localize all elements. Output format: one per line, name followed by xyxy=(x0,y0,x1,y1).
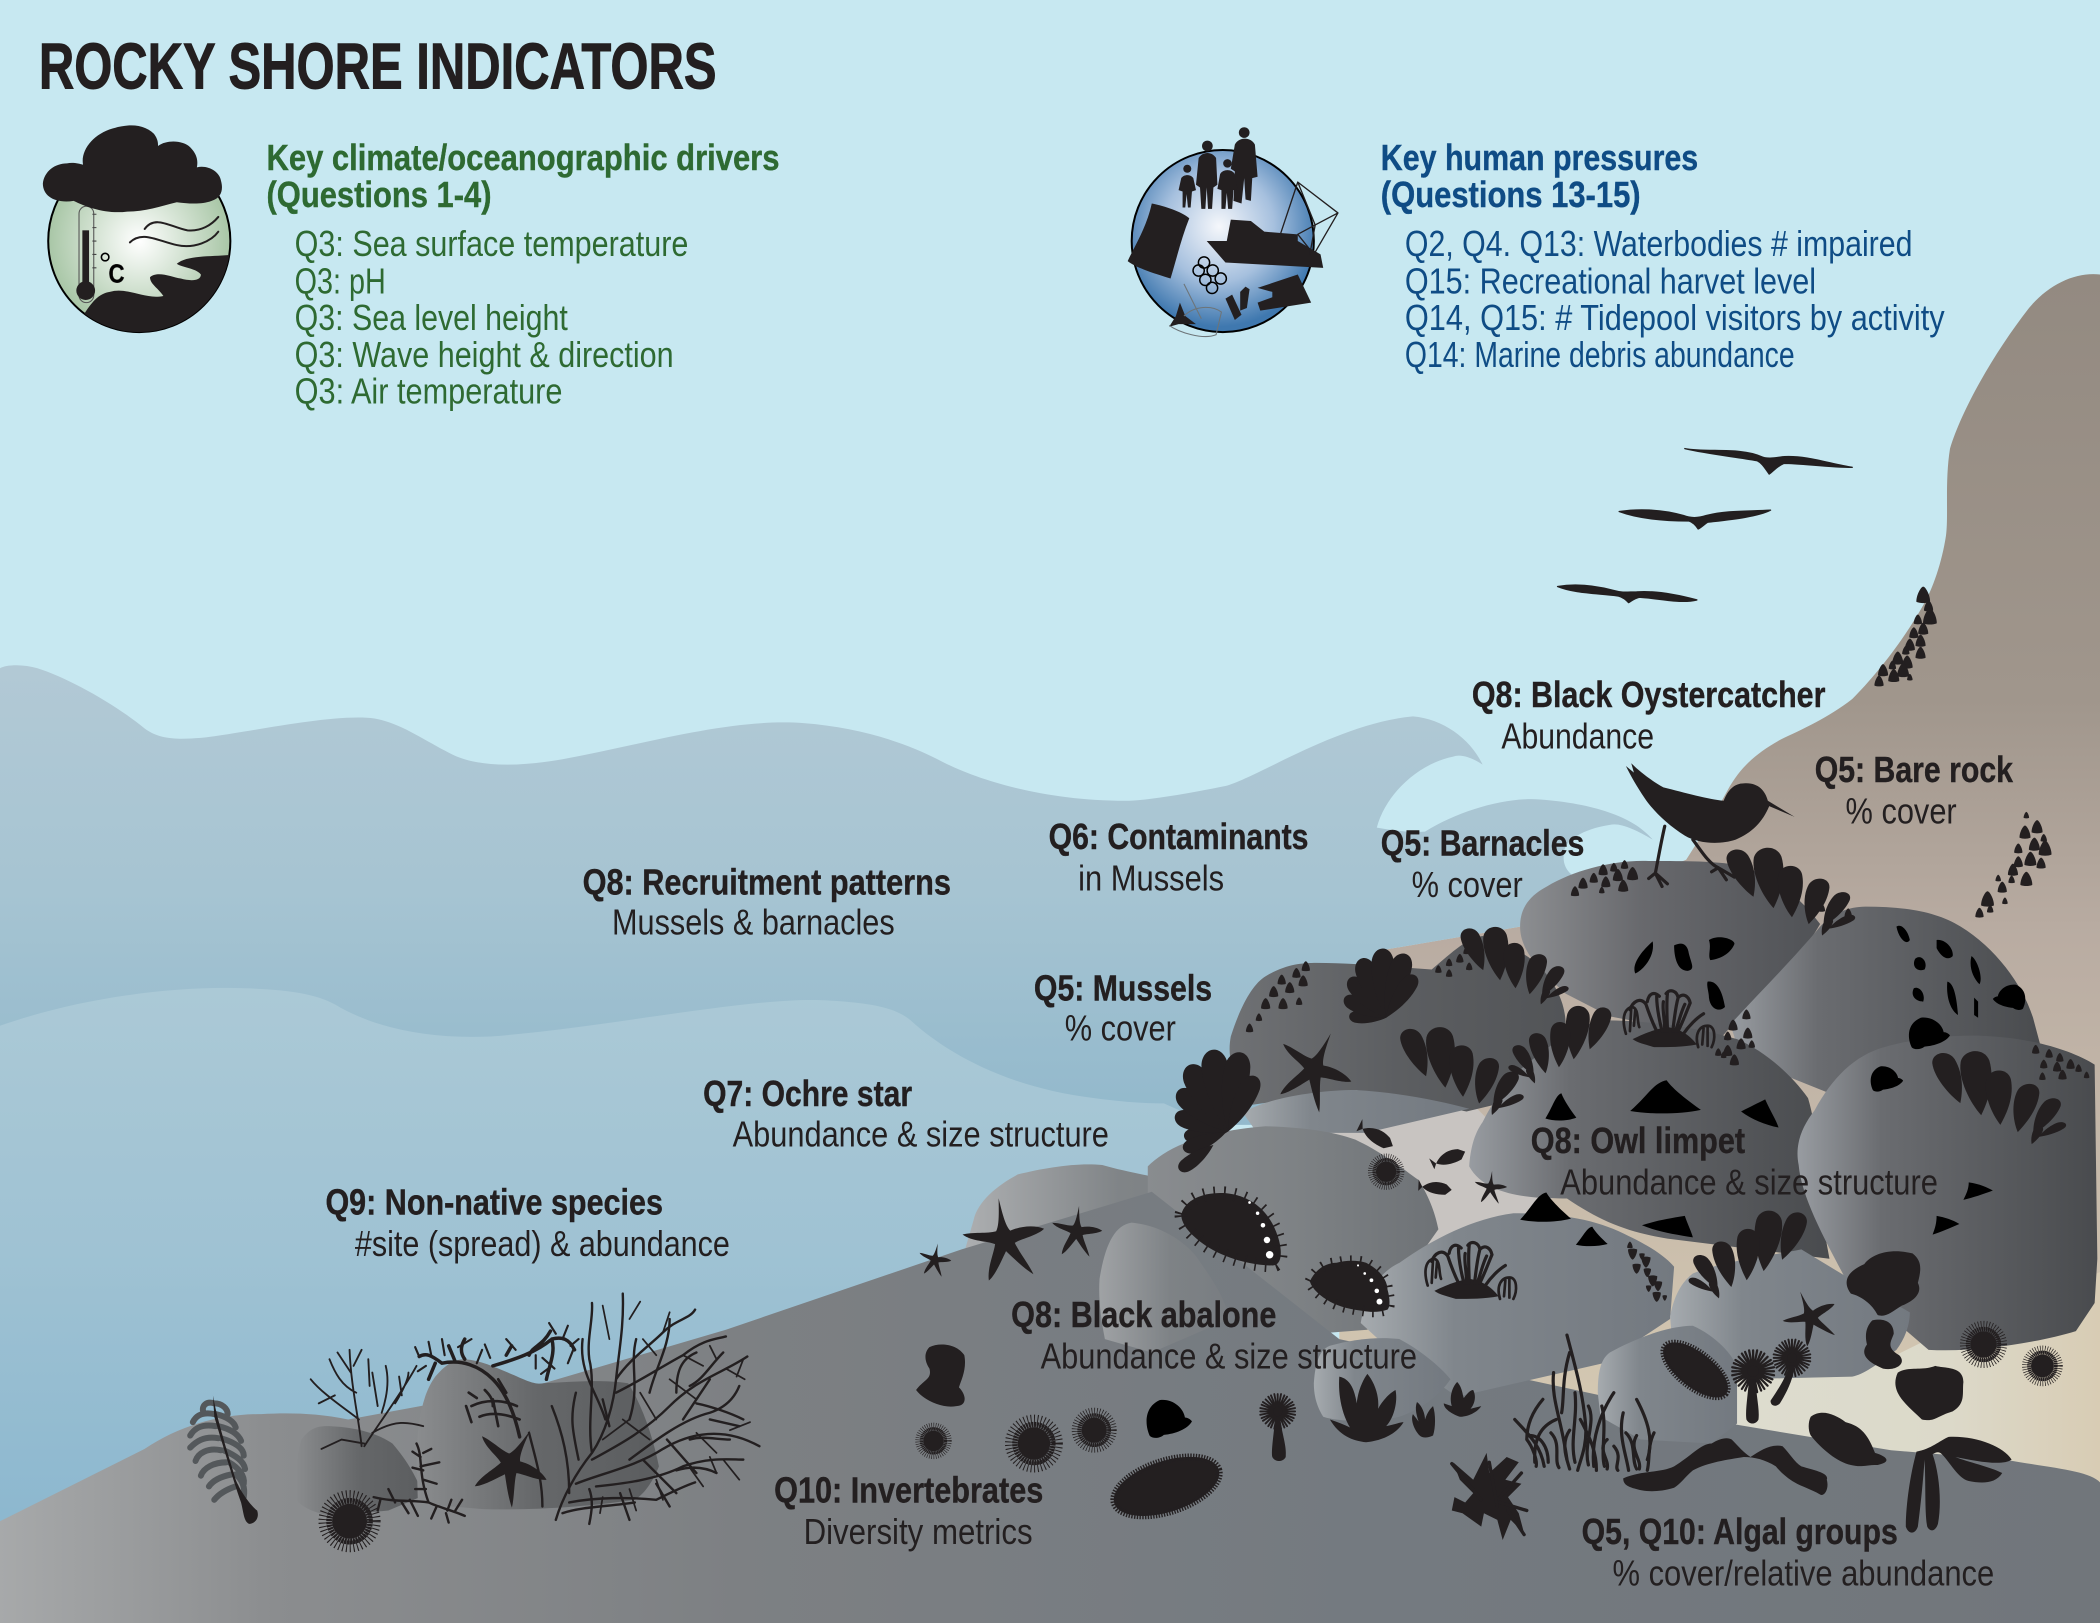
label: owl limpet xyxy=(1531,1120,1938,1202)
heading: climate drivers xyxy=(267,137,779,215)
rock: dark grey stone near fish xyxy=(1148,1126,1438,1339)
rock: lower right xyxy=(1798,1036,2097,1350)
heading: climate drivers: Key climate/oceanographic drivers xyxy=(267,137,779,178)
barnacles on cliff xyxy=(1874,587,1937,686)
label: barnacles: % cover xyxy=(1412,864,1523,905)
rock: right mid xyxy=(1670,1249,1910,1379)
blob algae xyxy=(916,1251,1963,1466)
rock: grey far left xyxy=(964,1164,1246,1319)
barnacles on perch rock xyxy=(1571,860,1852,917)
seagrass xyxy=(1515,1335,1654,1470)
list: human pressures: Q15: Recreational harvet level xyxy=(1405,260,1816,301)
rock: abalone side rock xyxy=(1099,1223,1229,1352)
icon: human pressures xyxy=(1128,127,1338,337)
label: contaminants: in Mussels xyxy=(1078,858,1224,899)
label: non-native species xyxy=(325,1182,730,1264)
label: mussels: % cover xyxy=(1065,1007,1176,1048)
rock: bird perch xyxy=(1520,861,1820,1038)
list: climate drivers: Q3: pH xyxy=(295,260,386,301)
label: black oystercatcher xyxy=(1472,674,1825,757)
hairy chitons xyxy=(1106,1332,1737,1528)
barnacles lower centre xyxy=(1627,1242,1667,1302)
list: climate drivers: Q3: Wave height & direction xyxy=(295,334,674,375)
label: recruitment patterns: Mussels & barnacles xyxy=(612,902,895,943)
label: barnacles: Q5: Barnacles xyxy=(1381,823,1584,864)
label: contaminants xyxy=(1049,816,1308,899)
cliff and sand xyxy=(1339,274,2100,1540)
anemones xyxy=(1260,1340,1810,1461)
label: contaminants: Q6: Contaminants xyxy=(1049,816,1308,857)
list: climate drivers xyxy=(295,223,688,412)
barnacles on bare rock xyxy=(1975,812,2051,918)
band algae xyxy=(1623,1437,2012,1533)
non-native seaweed fan xyxy=(529,1294,759,1524)
label: invertebrates: Q10: Invertebrates xyxy=(774,1469,1043,1510)
heading: human pressures xyxy=(1381,137,1698,215)
label: black oystercatcher: Abundance xyxy=(1501,716,1654,757)
front water xyxy=(0,988,1272,1527)
rock: lower right small xyxy=(1598,1326,1737,1444)
flying birds xyxy=(1558,449,1852,603)
icon: climate drivers xyxy=(40,125,234,341)
label: ochre star: Abundance & size structure xyxy=(733,1113,1109,1154)
list: human pressures: Q14: Marine debris abundance xyxy=(1405,334,1795,375)
mussels spots on perch rocks xyxy=(1147,926,2025,1438)
heading: human pressures: Key human pressures xyxy=(1381,137,1698,178)
label: non-native species: Q9: Non-native species xyxy=(325,1182,663,1223)
heading: human pressures: (Questions 13-15) xyxy=(1381,174,1641,215)
label: bare rock: % cover xyxy=(1846,791,1957,832)
non-native branching weed xyxy=(311,1350,423,1449)
rock: mid grey behind xyxy=(1243,1090,1469,1145)
label: invertebrates xyxy=(774,1469,1043,1552)
back wave xyxy=(0,665,1653,1125)
foreground ground xyxy=(0,1192,2100,1623)
non-native coral weed xyxy=(374,1323,579,1523)
black abalone xyxy=(1181,1193,1390,1312)
black oystercatcher xyxy=(1626,763,1795,886)
mussel clusters xyxy=(1171,847,2068,1299)
label: ochre star xyxy=(703,1073,1109,1154)
label: black oystercatcher: Q8: Black Oystercatcher xyxy=(1472,674,1825,715)
label: recruitment patterns: Q8: Recruitment patterns xyxy=(583,862,951,903)
label: algal groups xyxy=(1582,1511,1994,1594)
list: climate drivers: Q3: Air temperature xyxy=(295,371,563,412)
label: black abalone: Abundance & size structure xyxy=(1041,1336,1417,1377)
tube anemone clusters xyxy=(1425,991,1714,1299)
rock: central large xyxy=(1361,1213,1674,1397)
pale sand foreground xyxy=(1728,1272,2100,1489)
owl limpets xyxy=(1520,1080,1993,1246)
barnacles centre xyxy=(1715,1010,1755,1065)
heading: climate drivers: (Questions 1-4) xyxy=(267,174,492,215)
list: human pressures xyxy=(1405,223,1945,375)
title: ROCKY SHORE INDICATORS xyxy=(39,29,717,102)
label: black abalone xyxy=(1011,1294,1417,1377)
label: owl limpet: Q8: Owl limpet xyxy=(1531,1120,1745,1161)
rock: low left boulder xyxy=(296,1426,423,1516)
label: ochre star: Q7: Ochre star xyxy=(703,1073,912,1114)
list: climate drivers: Q3: Sea level height xyxy=(295,297,568,338)
barnacles lower right rock xyxy=(2032,1045,2089,1080)
label: bare rock: Q5: Bare rock xyxy=(1815,749,2014,790)
leafy algae xyxy=(1330,1374,1481,1442)
feather alga xyxy=(190,1395,258,1524)
rock: upper left xyxy=(1230,936,1566,1111)
list: climate drivers: Q3: Sea surface temperature xyxy=(295,223,688,264)
sand strip between rocks xyxy=(1286,1087,1560,1245)
label: algal groups: Q5, Q10: Algal groups xyxy=(1582,1511,1898,1552)
list: human pressures: Q14, Q15: # Tidepool visitors by activity xyxy=(1405,297,1945,338)
label: black abalone: Q8: Black abalone xyxy=(1011,1294,1276,1335)
label: algal groups: % cover/relative abundance xyxy=(1612,1553,1994,1594)
rock: tall left boulder xyxy=(417,1359,659,1509)
icon: climate drivers: C xyxy=(108,261,125,289)
label: owl limpet: Abundance & size structure xyxy=(1560,1161,1938,1202)
rock: owl limpet rock xyxy=(1469,1020,1829,1259)
label: mussels: Q5: Mussels xyxy=(1034,967,1212,1008)
rock: small front xyxy=(1314,1338,1450,1421)
label: barnacles xyxy=(1381,823,1584,905)
rock: right upper xyxy=(1730,907,2044,1111)
label: invertebrates: Diversity metrics xyxy=(804,1511,1033,1552)
list: human pressures: Q2, Q4. Q13: Waterbodies # impaired xyxy=(1405,223,1912,264)
bush algae xyxy=(1452,1453,1527,1540)
barnacles on upper left rocks xyxy=(1246,946,1472,1032)
sea stars xyxy=(459,1017,1845,1516)
label: recruitment patterns xyxy=(583,862,951,943)
fish and urchin in sand xyxy=(1355,1119,1467,1196)
label: bare rock xyxy=(1815,749,2014,832)
label: mussels xyxy=(1034,967,1212,1048)
urchins xyxy=(324,1325,2059,1546)
label: non-native species: #site (spread) & abundance xyxy=(355,1223,730,1264)
